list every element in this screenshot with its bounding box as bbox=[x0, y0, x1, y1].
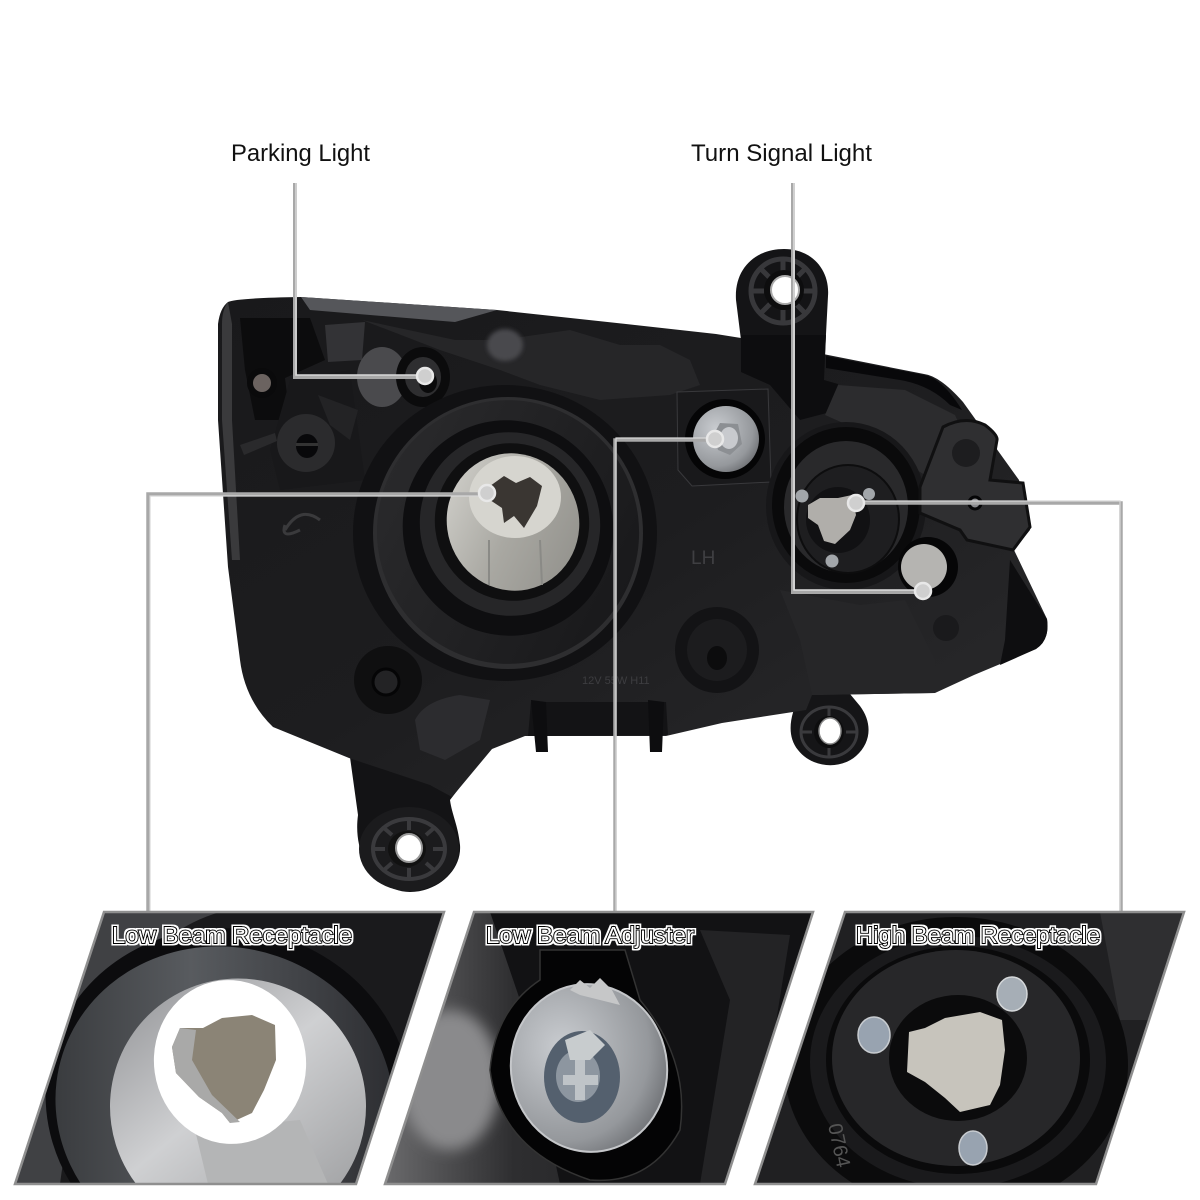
lug stem and block bbox=[741, 335, 838, 420]
faint moulding mark bbox=[284, 514, 320, 534]
high beam lens collar bbox=[766, 422, 926, 590]
leader line: Parking Light bbox=[295, 183, 433, 384]
screw, upper left bbox=[247, 368, 277, 398]
bulb opening bbox=[907, 1012, 1005, 1112]
parking light socket bbox=[357, 347, 450, 407]
panel: Low Beam Receptacle close-up bbox=[15, 912, 445, 1190]
housing body bbox=[218, 297, 1048, 797]
bottom left mounting lug bbox=[349, 735, 500, 892]
headlight assembly, rear view bbox=[218, 249, 1048, 892]
top mounting lug bbox=[736, 249, 828, 372]
screw bbox=[997, 977, 1027, 1011]
screw bbox=[959, 1131, 987, 1165]
low beam adjuster bracket bbox=[677, 389, 771, 486]
bulb opening bbox=[487, 476, 542, 528]
heading: Turn Signal Light: Turn Signal Light bbox=[691, 140, 872, 167]
body step, right side bbox=[825, 385, 985, 480]
side lever cover bbox=[920, 420, 1030, 550]
low beam lens collar bbox=[343, 366, 673, 698]
label: Low Beam Receptacle bbox=[112, 922, 352, 948]
moulded text: 12V 55W H11 bbox=[582, 675, 650, 687]
leader line: Low Beam Adjuster bbox=[615, 431, 723, 912]
lower left rib bbox=[415, 695, 490, 760]
lower adjuster knob bbox=[675, 607, 759, 693]
screws bbox=[796, 490, 808, 502]
label: Low Beam Adjuster bbox=[486, 922, 694, 948]
reflector bowl bbox=[429, 436, 597, 608]
lower right moulding bbox=[780, 590, 935, 695]
turn signal opening bbox=[898, 537, 958, 597]
screw bbox=[858, 1017, 890, 1053]
panel: High Beam Receptacle close-up bbox=[755, 912, 1185, 1190]
top clear lens edge bbox=[301, 297, 497, 322]
vent grommet bbox=[240, 395, 358, 472]
top right rim bbox=[826, 356, 962, 410]
leader line: High Beam Receptacle bbox=[848, 495, 1121, 912]
bottom right mounting lug bbox=[791, 694, 869, 765]
upper left recess bbox=[240, 318, 700, 490]
panel: High Beam Receptacle close-up: 0764 bbox=[823, 1121, 854, 1170]
label: High Beam Receptacle bbox=[856, 922, 1100, 948]
washer bbox=[510, 983, 668, 1153]
lower left socket bbox=[354, 646, 422, 714]
leader line: Low Beam Receptacle bbox=[148, 485, 495, 912]
bulb opening bbox=[808, 495, 856, 544]
leader line: Turn Signal Light bbox=[793, 183, 931, 599]
panel: Low Beam Adjuster close-up bbox=[385, 912, 815, 1184]
heading: Parking Light: Parking Light bbox=[231, 140, 370, 167]
LH moulded mark: LH bbox=[691, 548, 715, 569]
bottom connector bbox=[528, 700, 668, 752]
bolt head bbox=[544, 1031, 620, 1123]
retaining cup bbox=[490, 950, 682, 1180]
bulb opening bbox=[172, 1015, 276, 1123]
